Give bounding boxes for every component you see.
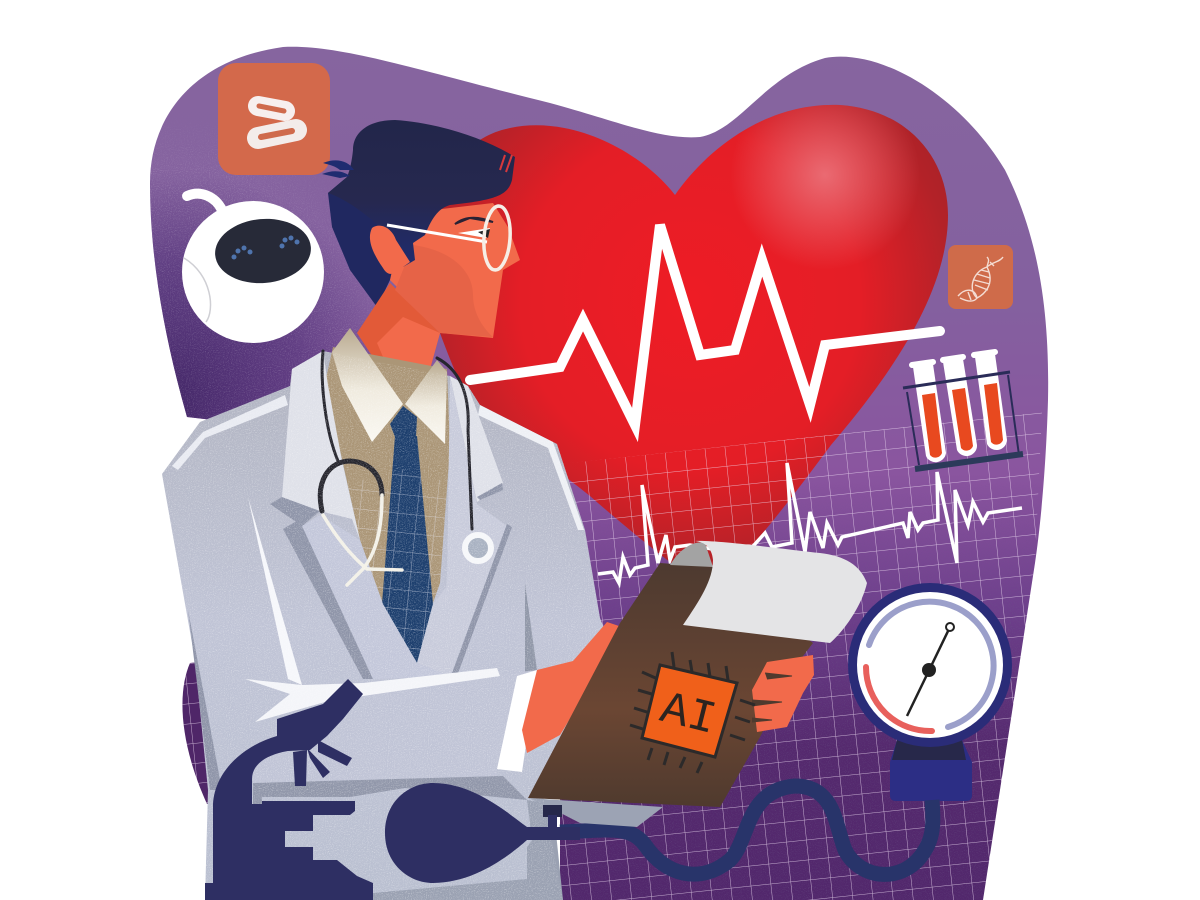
blood pressure bulb [385,783,580,883]
clipboard with AI chip [528,541,867,807]
hair top [322,120,515,267]
back hair [328,177,420,307]
microscope [205,679,373,900]
face [390,203,520,338]
grid overlay [555,405,1055,900]
paper sheet [683,541,867,643]
collar [332,328,447,444]
stethoscope [320,351,491,585]
glasses [387,205,512,271]
lower coat bands [253,776,663,900]
doctor [160,120,663,900]
small ECG trace [598,463,1022,583]
illustration: doctor with heart and medical AI tools [150,46,1048,900]
AI label: AI [655,683,721,747]
icon: round white robot [182,194,324,343]
hose [560,786,933,874]
icon: DNA tile [948,245,1013,309]
AI chip [642,665,737,757]
left lapels [270,351,450,679]
right lapels [417,376,512,676]
tie [382,406,433,663]
ear [370,226,410,274]
lab coat [162,351,620,900]
lower-left grid patch behind coat [182,660,220,804]
coat highlights [172,395,584,790]
coat grain [160,350,630,900]
icon: pills tile [218,63,330,175]
purple background blob [140,40,1050,900]
heartbeat line [470,225,940,425]
test tubes in a rack [903,352,1023,469]
left hand [522,622,625,753]
blood pressure gauge [848,583,1012,801]
shirt [325,347,450,611]
neck [357,283,440,403]
heart [440,105,948,590]
right hand [752,655,814,732]
chip pins [630,652,755,773]
sleeve [245,668,537,783]
